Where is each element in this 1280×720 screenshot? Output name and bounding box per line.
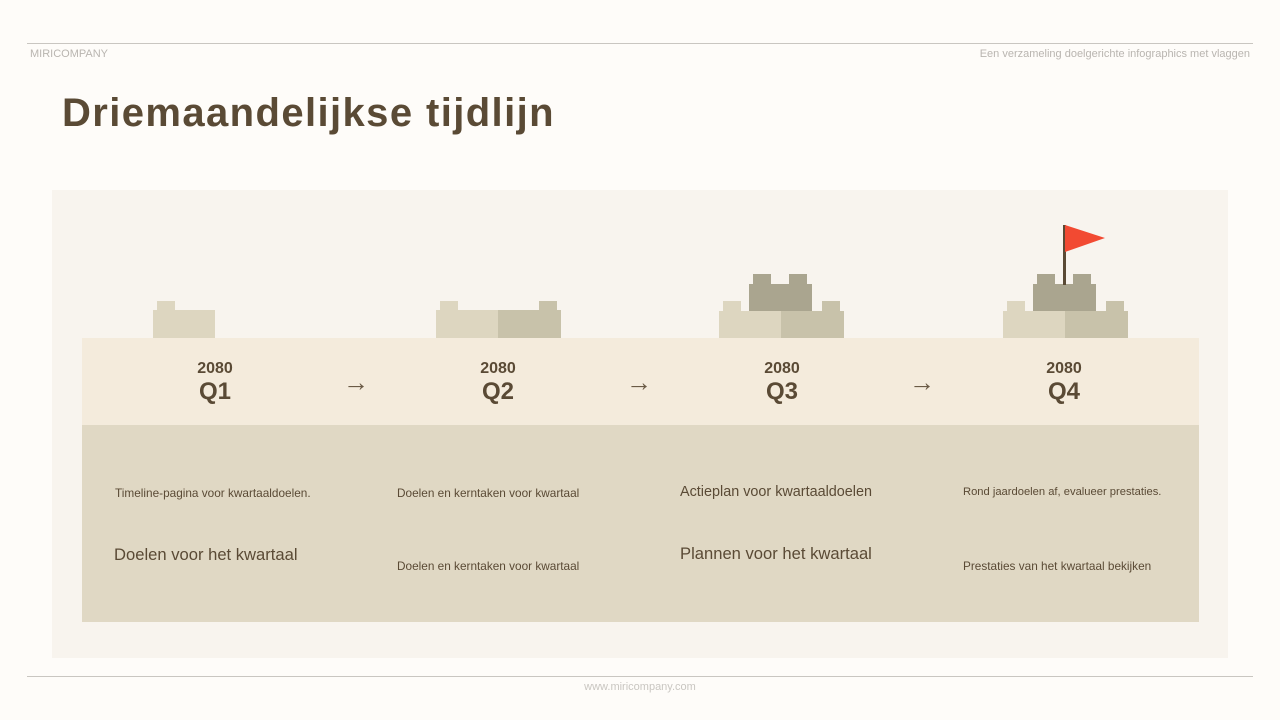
quarter Q4 [1046, 360, 1082, 405]
text Q4: Rond jaardoelen af, evalueer prestaties. [963, 486, 1161, 498]
text Q1 [114, 486, 311, 564]
panel: timeline [52, 190, 1228, 658]
quarter Q2 [480, 360, 516, 405]
quarter Q3: Q3 [766, 378, 798, 405]
quarter Q1: 2080 [197, 360, 233, 377]
text Q4 [963, 486, 1161, 573]
icon: Q2 blocks [436, 301, 561, 338]
text Q1: Timeline-pagina voor kwartaaldoelen. [115, 486, 311, 500]
icon: Q1 block [153, 301, 215, 338]
text Q2: Doelen en kerntaken voor kwartaal [397, 486, 579, 500]
text Q3: Actieplan voor kwartaaldoelen [680, 484, 872, 500]
arrow 3: → [909, 367, 935, 397]
quarter Q4: 2080 [1046, 360, 1082, 377]
quarter Q3 [764, 360, 800, 405]
quarter Q1: Q1 [199, 378, 231, 405]
quarter Q4: Q4 [1048, 378, 1080, 405]
icon: Q3 castle [719, 274, 844, 338]
text Q3 [680, 484, 872, 563]
header left: MIRICOMPANY [30, 48, 108, 60]
text Q3: Plannen voor het kwartaal [680, 544, 872, 563]
title: Driemaandelijkse tijdlijn [62, 91, 555, 135]
band: descriptions [82, 425, 1199, 622]
band: quarters [82, 338, 1199, 425]
text Q2 [397, 486, 579, 573]
text Q4: Prestaties van het kwartaal bekijken [963, 559, 1151, 573]
arrow 2: → [626, 367, 652, 397]
text Q2: Doelen en kerntaken voor kwartaal [397, 559, 579, 573]
quarter Q2: 2080 [480, 360, 516, 377]
icon: Q4 castle with flag [1003, 225, 1128, 338]
quarter Q3: 2080 [764, 360, 800, 377]
footer: www.miricompany.com [584, 681, 696, 693]
quarter Q1 [197, 360, 233, 405]
text Q1: Doelen voor het kwartaal [114, 545, 298, 564]
quarter Q2: Q2 [482, 378, 514, 405]
arrow 1: → [343, 367, 369, 397]
header right: Een verzameling doelgerichte infographics met vlaggen [980, 48, 1250, 60]
